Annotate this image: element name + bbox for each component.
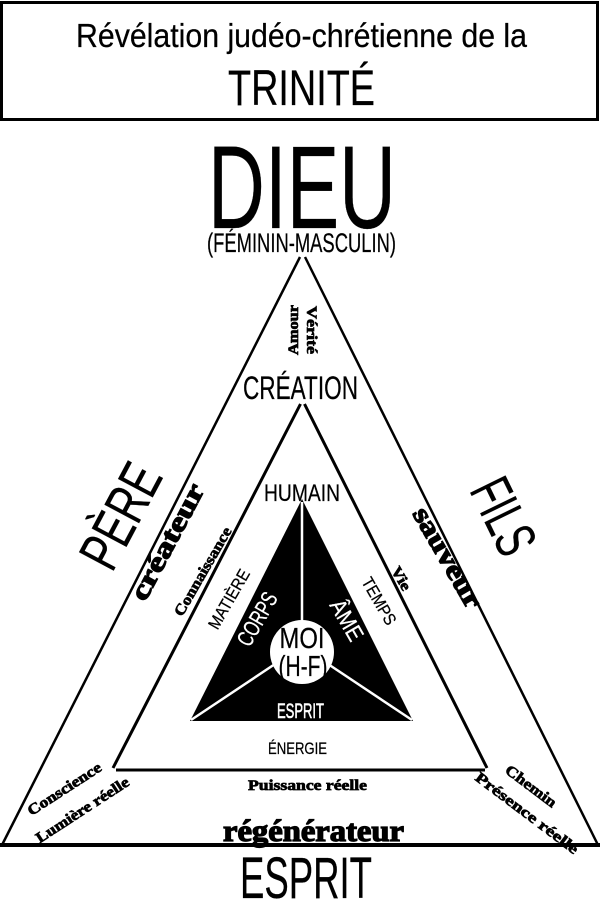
label: Puissance réelle: Puissance réelle — [248, 778, 367, 794]
outer triangle — [0, 257, 600, 845]
white spokes — [191, 502, 412, 720]
label: Connaissance: Connaissance — [172, 524, 236, 619]
label: Conscience: Conscience — [25, 760, 105, 820]
label: CORPS: CORPS — [231, 587, 283, 651]
label: HUMAIN: HUMAIN — [264, 480, 340, 507]
title line 2: TRINITÉ — [228, 60, 375, 116]
label: MATIÈRE: MATIÈRE — [205, 566, 254, 633]
label: Présence réelle: Présence réelle — [472, 770, 581, 858]
heading: FILS: FILS — [457, 468, 549, 566]
label: Chemin: Chemin — [502, 762, 560, 812]
panel: title box — [2, 2, 598, 120]
label: Amour: Amour — [286, 305, 302, 355]
title line 1: Révélation judéo-chrétienne de la — [76, 17, 528, 54]
inner triangle — [113, 404, 487, 770]
label: Vie: Vie — [387, 564, 414, 594]
label: Lumière réelle: Lumière réelle — [33, 774, 133, 847]
label: ÉNERGIE: ÉNERGIE — [268, 739, 327, 758]
label: ÂME: ÂME — [325, 594, 369, 646]
heading: PÈRE: PÈRE — [67, 452, 175, 580]
label: sauveur: sauveur — [407, 502, 489, 614]
label: régénérateur: régénérateur — [223, 813, 404, 848]
label: CRÉATION: CRÉATION — [243, 370, 358, 406]
label: MOI: MOI — [280, 623, 324, 655]
centre circle — [270, 620, 334, 684]
subheading: féminin-masculin: (FÉMININ-MASCULIN) — [207, 228, 396, 258]
central black triangle — [190, 499, 413, 723]
label: Vérité: Vérité — [303, 306, 319, 354]
label: ESPRIT inner: ESPRIT — [277, 700, 324, 723]
label: H-F: (H-F) — [278, 651, 328, 683]
label: créateur: créateur — [124, 478, 210, 605]
label: TEMPS: TEMPS — [358, 574, 400, 629]
heading: DIEU: DIEU — [208, 122, 396, 254]
